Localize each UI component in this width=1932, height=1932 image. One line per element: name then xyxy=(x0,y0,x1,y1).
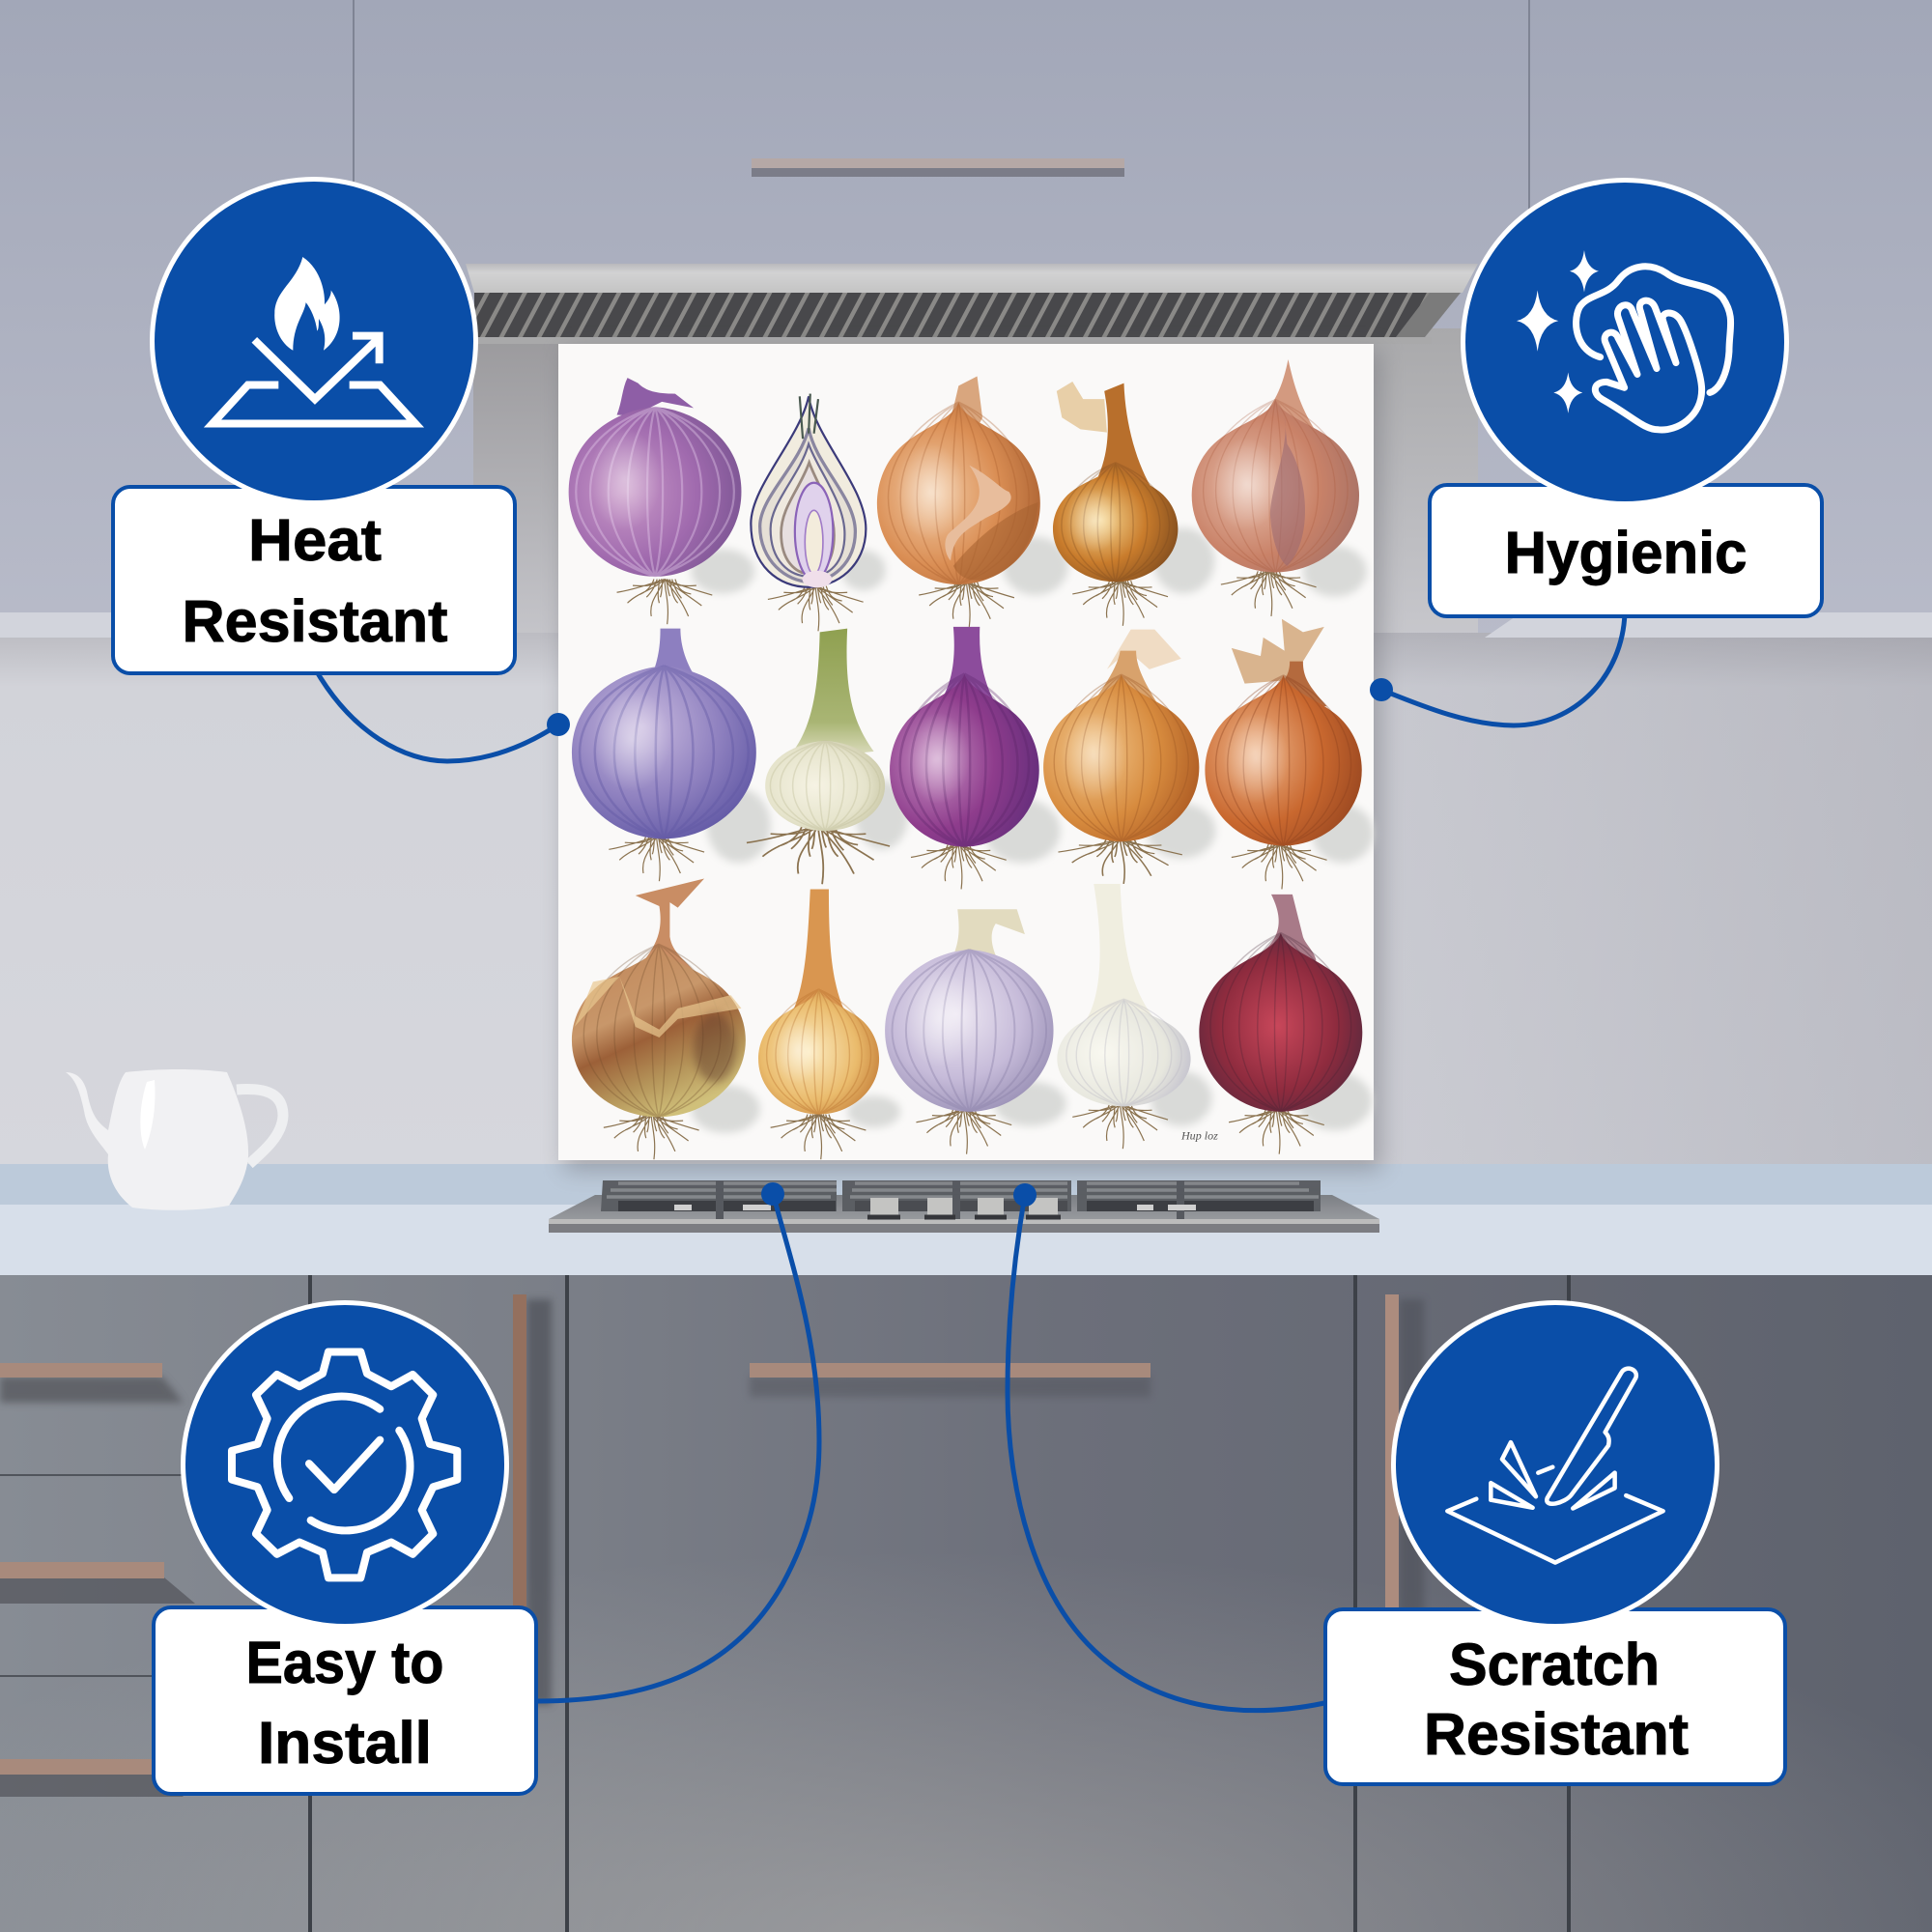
callout: Easy to Install xyxy=(154,1182,819,1794)
label box: Easy to Install: Install xyxy=(258,1710,432,1776)
badge: Hygienic xyxy=(1461,178,1789,506)
wall xyxy=(0,633,1932,1174)
centre lower handle xyxy=(750,1363,1151,1397)
wall behind hood right xyxy=(956,328,1478,647)
label box: Heat Resistant: Resistant xyxy=(182,588,448,654)
icon: flame and deflection arrow xyxy=(213,257,415,424)
teapot xyxy=(66,1069,283,1210)
connector: Heat Resistant xyxy=(315,668,570,761)
callout: Scratch Resistant xyxy=(1008,1183,1785,1784)
backsplash band xyxy=(0,1164,1932,1207)
label box: Hygienic: Hygienic xyxy=(1505,520,1747,585)
vertical handles xyxy=(513,1294,1424,1710)
panel shadow xyxy=(564,350,1381,1171)
hob xyxy=(549,1180,1379,1233)
label box: Heat Resistant: Heat xyxy=(248,507,382,573)
connector: Hygienic xyxy=(1370,612,1625,725)
onion splashback panel xyxy=(558,344,1374,1160)
onion 12: yellow xyxy=(758,889,879,1159)
wall behind hood left xyxy=(473,328,956,647)
label box: Scratch Resistant: Resistant xyxy=(1424,1701,1689,1767)
label box: Heat Resistant xyxy=(113,487,515,673)
onion 13: lilac xyxy=(885,909,1054,1154)
onion shadows xyxy=(691,527,1374,1133)
onion 9: golden xyxy=(1043,630,1199,884)
callout: Heat Resistant xyxy=(113,177,570,761)
onion 4: brown xyxy=(1053,382,1178,626)
onion 7: white with green stem xyxy=(747,629,890,884)
onion 6: violet xyxy=(572,629,756,881)
icon: gear with check xyxy=(232,1351,457,1577)
connector: Scratch Resistant xyxy=(1008,1183,1324,1711)
artist signature: Hup loz xyxy=(1180,1128,1218,1142)
lower cabinet seams xyxy=(310,1275,1569,1932)
onion 5: pink brown xyxy=(1192,359,1359,616)
drawer seams xyxy=(0,1475,310,1676)
onion 11: brown olive xyxy=(572,878,746,1159)
upper cabinet seams xyxy=(354,0,1529,263)
connector: Easy to Install xyxy=(537,1182,819,1701)
drawer handles xyxy=(0,1363,195,1797)
icon: knife scratching surface xyxy=(1447,1369,1663,1563)
knobs xyxy=(870,1198,1058,1215)
label box: Easy to Install: Easy to xyxy=(245,1630,444,1695)
left shelf strip xyxy=(0,612,473,638)
onion 10: orange red xyxy=(1205,619,1362,889)
upper cabinet handle xyxy=(752,158,1124,177)
onion 3: orange with peel xyxy=(877,376,1040,627)
onion 8: magenta xyxy=(890,627,1039,889)
icon: hand wiping with sparkles xyxy=(1517,250,1731,430)
onion 1: purple xyxy=(569,378,741,624)
badge: Scratch Resistant xyxy=(1391,1300,1719,1629)
label box: Scratch Resistant xyxy=(1325,1609,1785,1784)
badge: Heat Resistant xyxy=(150,177,478,505)
countertop xyxy=(0,1205,1932,1275)
label box: Easy to Install xyxy=(154,1607,536,1794)
onion 15: burgundy xyxy=(1199,895,1362,1154)
onion 14: white garlic-like xyxy=(1057,884,1191,1149)
lower cabinets xyxy=(0,1275,1932,1932)
badge: Easy to Install xyxy=(181,1300,509,1629)
callout: Hygienic xyxy=(1370,178,1822,725)
label box: Scratch Resistant: Scratch xyxy=(1449,1632,1660,1697)
label box: Hygienic xyxy=(1430,485,1822,616)
right shelf strip xyxy=(1485,612,1932,638)
onion 2: cut purple onion xyxy=(751,394,866,631)
range hood xyxy=(466,264,1478,344)
